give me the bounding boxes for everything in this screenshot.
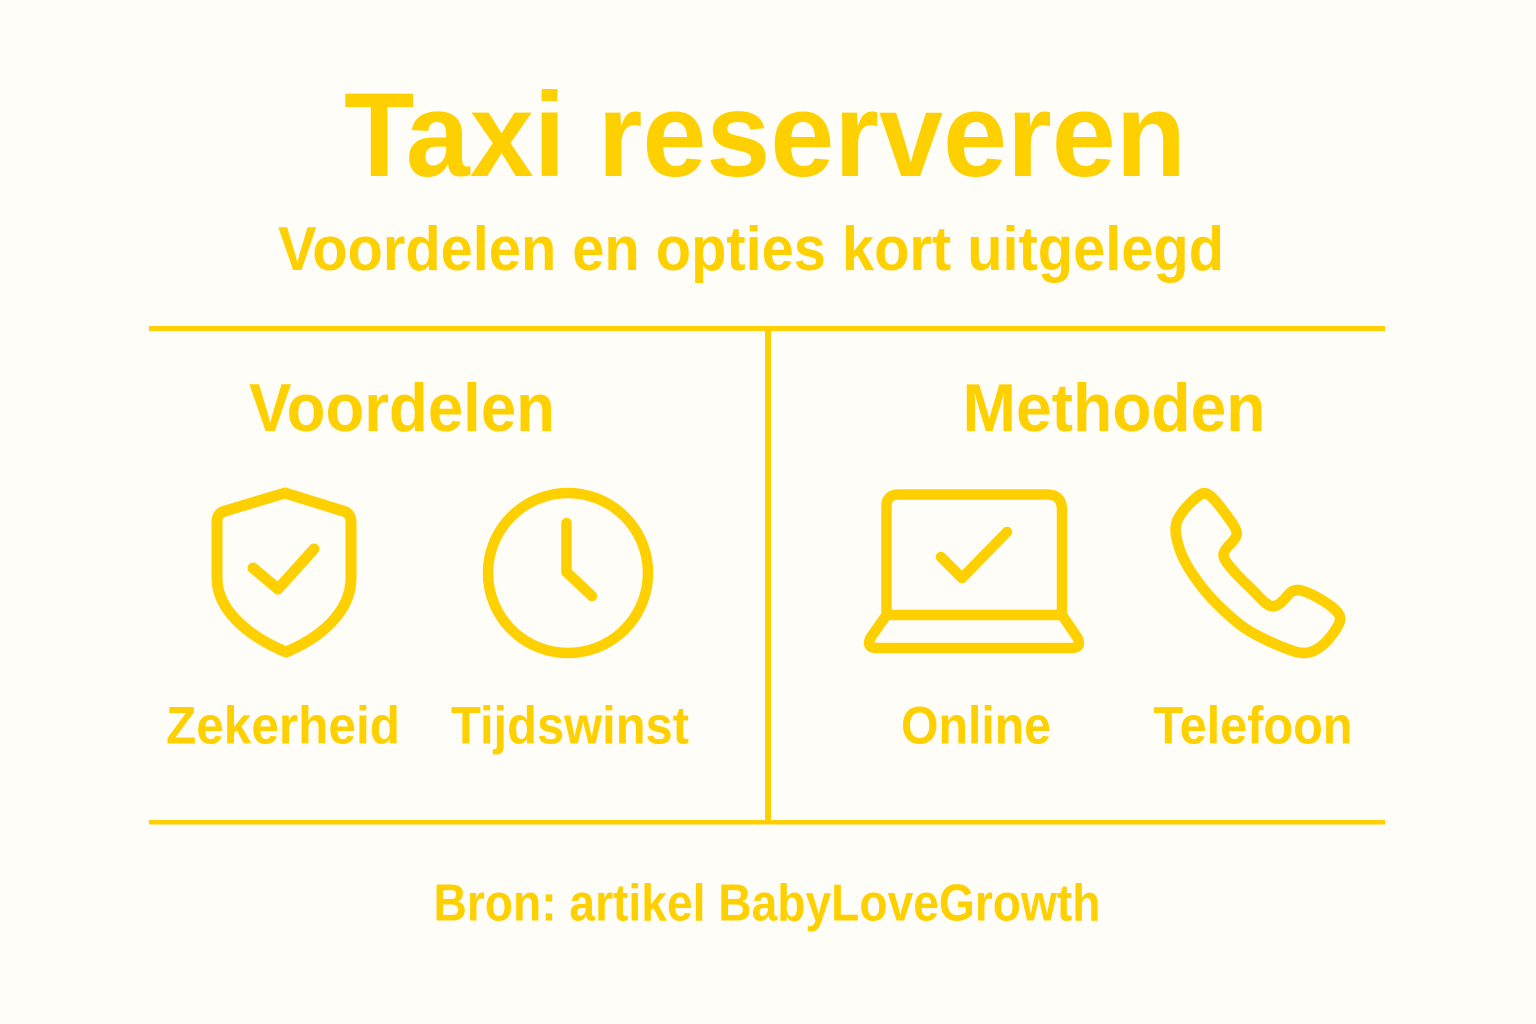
- icon: clock: [488, 493, 648, 653]
- label: zekerheid: Zekerheid: [166, 696, 400, 756]
- top divider: [149, 326, 1385, 331]
- panel: voordelen: [166, 370, 689, 756]
- subtitle: Voordelen en opties kort uitgelegd: [278, 215, 1224, 284]
- panel: methoden: [869, 370, 1352, 756]
- source line: Bron: artikel BabyLoveGrowth: [434, 874, 1100, 932]
- label: tijdswinst: Tijdswinst: [451, 696, 689, 756]
- centre divider: [765, 328, 771, 822]
- bottom divider: [149, 820, 1385, 824]
- icon: shield with check: [217, 493, 351, 652]
- label: online: Online: [901, 696, 1051, 756]
- icon: telephone: [1176, 493, 1340, 653]
- icon: laptop with check: [869, 494, 1079, 648]
- heading: methoden: Methoden: [962, 370, 1266, 446]
- title: Taxi reserveren: [344, 68, 1186, 202]
- heading: voordelen: Voordelen: [249, 370, 555, 446]
- label: telefoon: Telefoon: [1154, 696, 1352, 756]
